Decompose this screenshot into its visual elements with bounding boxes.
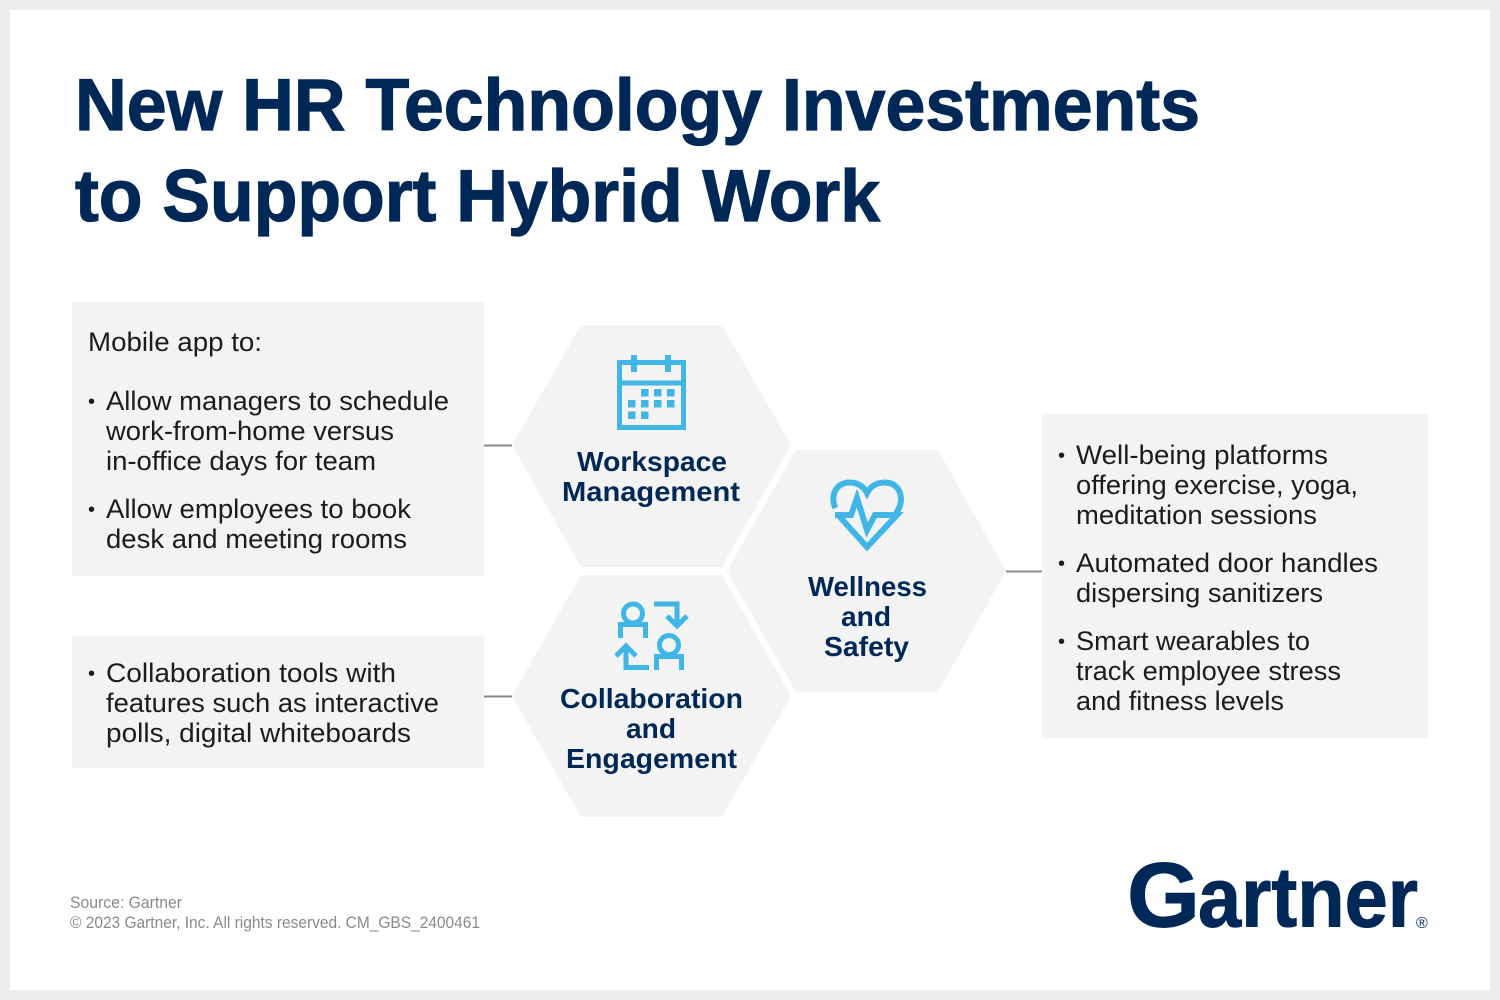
logo: Gartner: G — [1127, 844, 1200, 946]
icon: calendar — [619, 355, 684, 428]
label: wellness and safety — [808, 571, 927, 662]
source note: Source: Gartner — [70, 893, 182, 912]
panel: workspace management details: desk and meeting rooms — [106, 524, 407, 554]
source note — [70, 893, 480, 932]
label: collaboration and engagement: Engagement — [566, 743, 737, 774]
panel: wellness details: Well-being platforms — [1076, 440, 1328, 470]
panel: wellness details: meditation sessions — [1076, 500, 1317, 530]
panel: wellness details: Smart wearables to — [1076, 626, 1310, 656]
connector: workspace — [484, 444, 512, 446]
logo: Gartner: ® — [1416, 915, 1428, 932]
icon: people exchange — [616, 604, 687, 670]
panel: wellness details: Automated door handles — [1076, 548, 1378, 578]
panel: workspace management details: • — [88, 499, 95, 521]
panel: workspace management details: Allow managers to schedule — [106, 386, 449, 416]
panel: wellness details — [1042, 414, 1428, 738]
source note: © 2023 Gartner, Inc. All rights reserved. CM_GBS_2400461 — [70, 913, 480, 932]
panel: collaboration details: polls, digital whiteboards — [106, 718, 411, 748]
logo: Gartner — [1127, 844, 1428, 946]
label: workspace management: Management — [562, 476, 740, 507]
panel: workspace management details — [72, 302, 484, 576]
panel: wellness details: offering exercise, yoga, — [1076, 470, 1358, 500]
panel: wellness details: dispersing sanitizers — [1076, 578, 1323, 608]
panel: workspace management details: work-from-home versus — [105, 416, 394, 446]
hexagon: wellness and safety — [727, 450, 1006, 692]
panel: collaboration details: • — [88, 663, 95, 685]
label: workspace management — [562, 446, 740, 507]
panel: workspace management details: in-office days for team — [106, 446, 376, 476]
label: collaboration and engagement — [560, 683, 743, 774]
panel: wellness details: • — [1058, 631, 1065, 653]
label: wellness and safety: Safety — [824, 631, 909, 662]
label: wellness and safety: Wellness — [808, 571, 927, 602]
panel: collaboration details: features such as interactive — [106, 688, 439, 718]
panel: wellness details: • — [1058, 445, 1065, 467]
panel: wellness details: • — [1058, 553, 1065, 575]
connector: collaboration — [484, 696, 512, 698]
label: wellness and safety: and — [841, 601, 891, 632]
title — [75, 65, 1200, 237]
panel: collaboration details — [72, 636, 484, 768]
hexagon: collaboration and engagement — [512, 575, 791, 817]
panel: collaboration details: Collaboration tools with — [106, 658, 396, 688]
panel: wellness details: track employee stress — [1076, 656, 1341, 686]
panel: workspace management details: Allow employees to book — [106, 494, 411, 524]
label: collaboration and engagement: and — [626, 713, 676, 744]
icon: heart with pulse — [833, 482, 901, 547]
title: New HR Technology Investments — [75, 65, 1200, 146]
logo: Gartner: artner — [1198, 850, 1418, 944]
label: collaboration and engagement: Collaboration — [560, 683, 743, 714]
panel: wellness details: and fitness levels — [1076, 686, 1284, 716]
label: workspace management: Workspace — [577, 446, 727, 477]
panel: workspace management details: • — [88, 391, 95, 413]
title: to Support Hybrid Work — [75, 156, 880, 237]
panel: workspace management details: Mobile app to: — [88, 327, 262, 357]
connector: wellness — [1006, 570, 1042, 572]
hexagon: workspace management — [512, 325, 791, 567]
